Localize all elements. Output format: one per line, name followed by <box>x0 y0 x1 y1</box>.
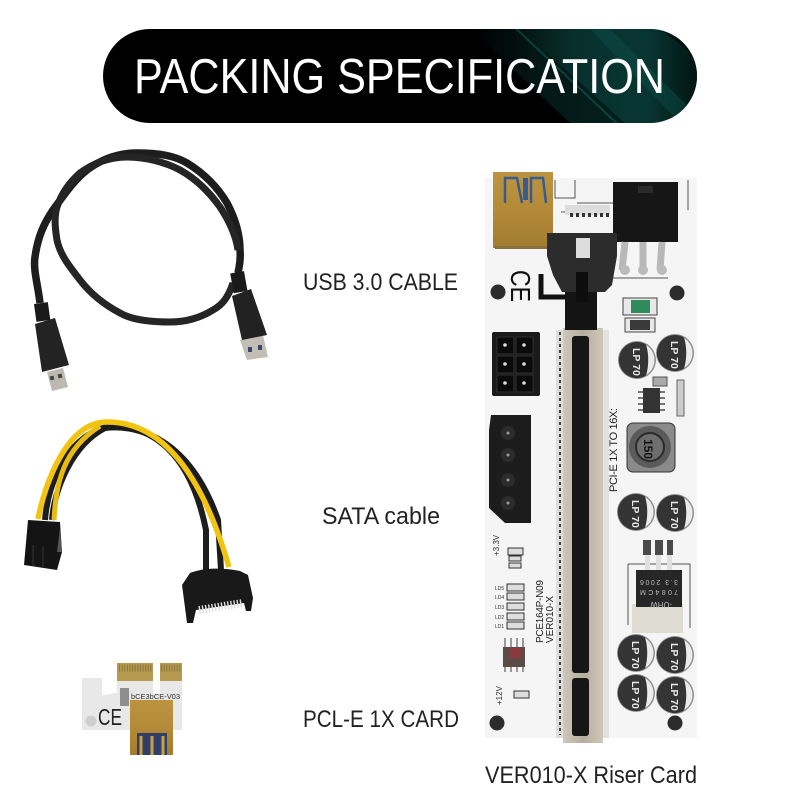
voltage regulator: 7084CM <box>640 588 678 595</box>
small chip U2 <box>638 377 684 416</box>
riser card: VER010-X <box>545 596 556 643</box>
slot latch <box>547 233 617 330</box>
LED column: LD5 <box>495 586 504 592</box>
mounting holes <box>490 284 684 730</box>
LED column <box>495 548 529 698</box>
6-pin power socket <box>492 332 540 396</box>
small red chip <box>503 638 525 672</box>
label: SATA cable: SATA cable <box>322 503 440 530</box>
molex socket <box>489 415 531 523</box>
riser card: +3.3V <box>492 534 501 556</box>
LED column: LD2 <box>495 615 504 621</box>
label: riser card: VER010-X Riser Card <box>485 762 697 789</box>
riser card: +12V <box>495 685 504 705</box>
label: USB 3.0 cable: USB 3.0 CABLE <box>303 269 458 296</box>
LED column: LD4 <box>495 595 504 601</box>
board silkscreen: PCI-E 1X TO 16X: <box>608 408 620 492</box>
black power header <box>613 182 678 275</box>
CE mark: CE <box>505 270 536 302</box>
LED column: LD3 <box>495 605 504 611</box>
voltage regulator: 3.3 2006 <box>640 578 678 585</box>
USB 3.0 cable <box>34 153 268 391</box>
capacitors <box>617 334 694 714</box>
right plug <box>230 271 268 360</box>
LED column: LD1 <box>495 624 504 630</box>
inductor <box>627 423 675 472</box>
SATA power connector <box>182 569 253 623</box>
6-pin connector <box>24 520 62 570</box>
left plug <box>34 302 69 391</box>
fuse <box>623 298 657 315</box>
PCI-E 1X card: CE <box>98 704 122 730</box>
inductor: 150 <box>641 439 655 459</box>
board <box>485 178 697 738</box>
voltage regulator: -UHW <box>650 600 672 609</box>
SATA cable <box>24 422 253 623</box>
diode <box>625 318 655 332</box>
title banner <box>103 29 700 123</box>
label: PCL-E 1X card: PCL-E 1X CARD <box>303 706 459 733</box>
PCI-E 16x slot <box>563 328 603 743</box>
PCI-E 1X card: bCE3bCE-V03 <box>131 692 180 701</box>
riser card: PCE164P-N09 <box>535 580 546 643</box>
riser card <box>485 172 697 743</box>
title text: PACKING SPECIFICATION <box>134 50 665 104</box>
PCI-E 1X card <box>82 663 182 755</box>
USB port <box>493 172 553 249</box>
voltage regulator <box>632 540 683 633</box>
